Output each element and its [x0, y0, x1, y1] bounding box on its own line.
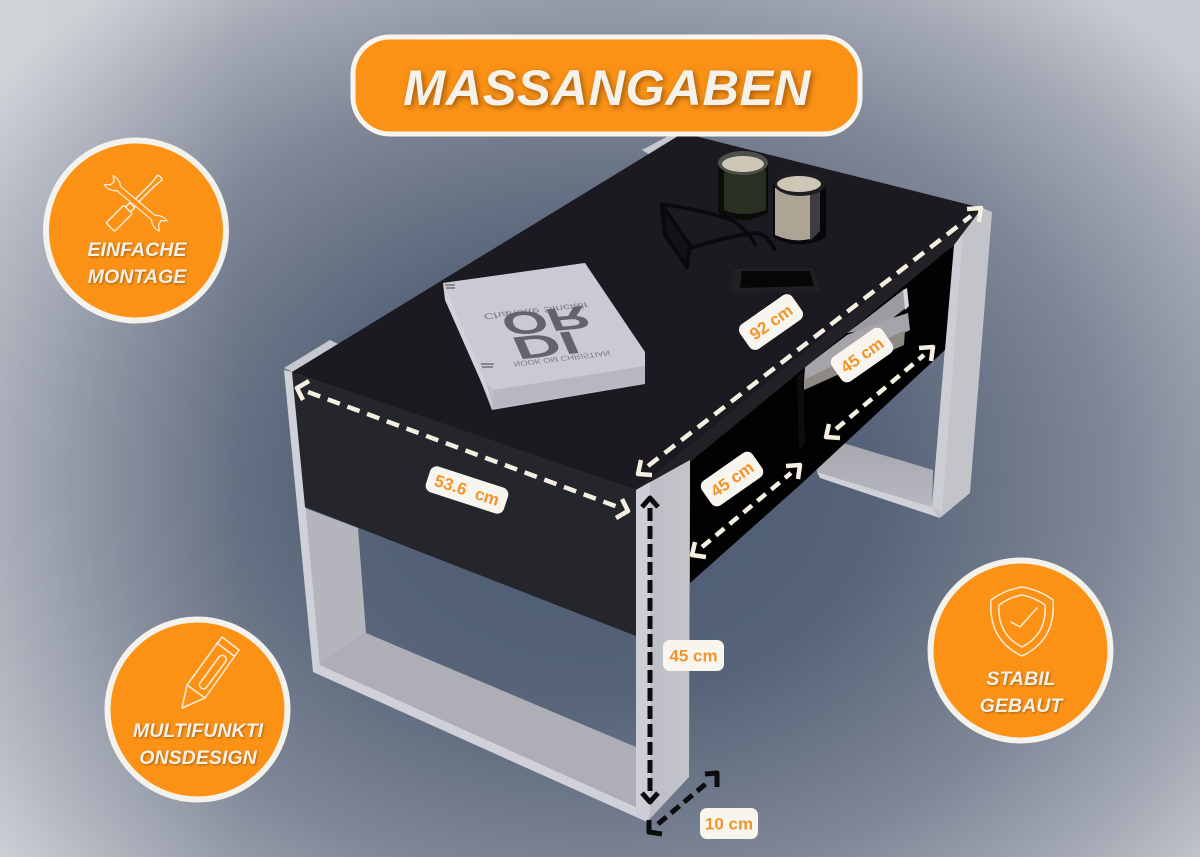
label: MULTIFUNKTI [133, 720, 264, 742]
front right post [636, 460, 690, 822]
side lip of tabletop [636, 208, 982, 490]
label: 53.6 cm [424, 464, 510, 516]
green candle [718, 151, 768, 220]
front face of tabletop [292, 372, 636, 636]
book title [482, 298, 611, 368]
badge: multifunktionsdesign [108, 620, 288, 800]
coffee table illustration [284, 133, 992, 822]
icon: shield with check [991, 587, 1053, 656]
icon: pencil [182, 637, 239, 708]
shelf divider [797, 372, 805, 450]
book on the table [443, 263, 645, 410]
books on shelf [804, 288, 910, 390]
label: 53.6 cm: 53.6 cm [432, 471, 502, 510]
badge: stabil gebaut [930, 560, 1110, 740]
title pill [353, 37, 860, 134]
label: 45 cm height: 45 cm [669, 646, 718, 666]
shelf opening [690, 245, 954, 583]
label: GEBAUT [980, 695, 1064, 717]
grey candle [773, 170, 826, 244]
dimension arrow: shelf depth right [826, 347, 933, 438]
label: 45 cm height [663, 640, 724, 671]
title text: MASSANGABEN [403, 59, 812, 116]
label: 10 cm: 10 cm [705, 814, 753, 834]
label: MONTAGE [88, 266, 187, 288]
label: 92 cm: 92 cm [746, 301, 796, 344]
label: ONSDESIGN [139, 747, 258, 769]
eyeglasses [661, 204, 775, 267]
left U-frame leg [284, 340, 647, 822]
smartphone [730, 269, 821, 293]
label: 45 cm upper shelf [828, 325, 896, 385]
book title: OR [495, 298, 596, 342]
tabletop surface [292, 133, 982, 490]
right U-frame leg [810, 208, 992, 518]
label [133, 720, 264, 769]
dimension arrow: height [642, 498, 658, 802]
badge: einfache montage [46, 140, 226, 320]
label: 92 cm [736, 291, 806, 353]
icon: wrench and screwdriver [104, 173, 168, 232]
book title: DI [506, 324, 586, 366]
dimension arrow: width 53.6 cm [297, 381, 628, 518]
label: 45 cm lower shelf [698, 449, 766, 509]
dimension arrow: length 92 cm [638, 208, 981, 475]
label: STABIL [986, 668, 1056, 690]
label [980, 668, 1064, 717]
label: EINFACHE [87, 239, 187, 261]
label [87, 239, 187, 288]
label: 45 cm lower shelf: 45 cm [707, 458, 757, 501]
label: 10 cm [700, 808, 758, 839]
label: 45 cm upper shelf: 45 cm [837, 334, 887, 377]
book title: NOOK OM CHRISTIAN [512, 349, 611, 368]
dimension arrow: leg thickness [649, 773, 717, 834]
back corner of frame [642, 134, 683, 158]
book title: Charlotte Sinclair [482, 300, 590, 320]
dimension arrow: shelf depth left [692, 465, 800, 557]
